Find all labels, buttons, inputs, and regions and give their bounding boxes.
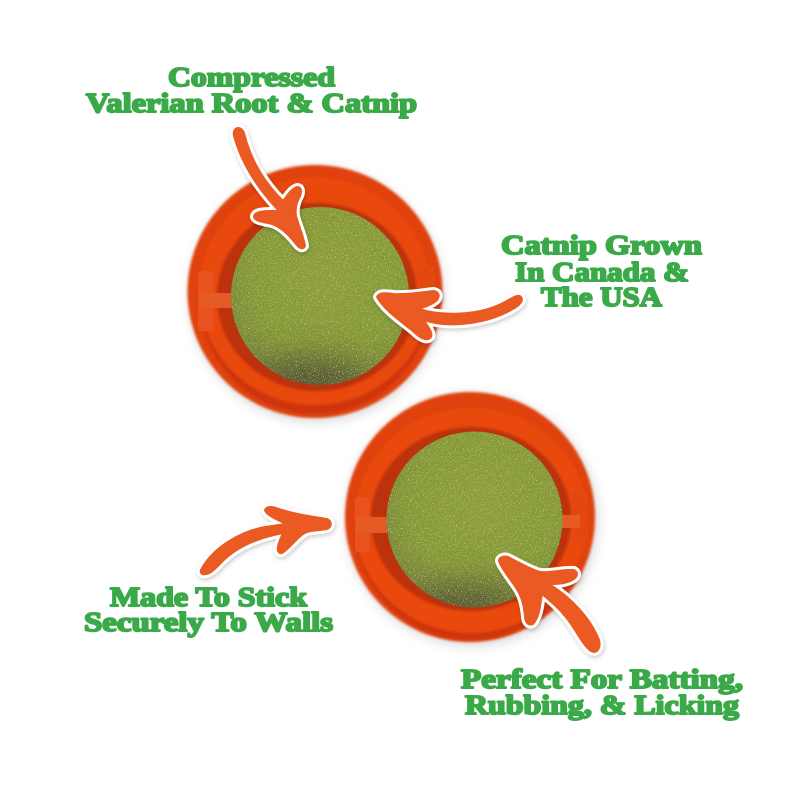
arrow: to catnip grown label [377,291,522,339]
lower rim shading [199,178,431,414]
label: made to stick securely to walls: Made To Stick [110,582,307,612]
cap opening [371,427,571,611]
label: catnip grown in Canada and the USA: Catnip Grown [501,230,702,260]
orange cap base [345,392,595,642]
label: compressed valerian root and catnip: Compressed [168,62,335,92]
right tab [417,266,435,306]
toy: bottom catnip ball in orange cap [345,392,598,646]
raised inner ring [354,407,588,633]
label: perfect for batting, rubbing, and licking [461,664,743,720]
cap opening [217,203,417,391]
label: perfect for batting, rubbing, and licking: Perfect For Batting, [461,664,743,694]
cap shadow [189,168,443,422]
label: compressed valerian root and catnip [86,62,417,118]
label: compressed valerian root and catnip: Valerian Root & Catnip [86,88,417,118]
left tab and stem [198,271,233,331]
label: made to stick securely to walls: Securely To Walls [84,607,333,637]
left tab and stem [355,497,390,552]
lower rim shading [354,408,586,640]
raised inner ring [199,177,431,405]
label: made to stick securely to walls [84,582,333,637]
toy: top catnip ball in orange cap [188,165,443,422]
label: catnip grown in Canada and the USA [501,230,702,312]
catnip ball [386,432,562,608]
label: perfect for batting, rubbing, and licking: Rubbing, & Licking [465,690,740,720]
label: catnip grown in Canada and the USA: In Canada & [515,257,689,287]
arrow: to wall-sticking base [201,507,331,574]
arrow: to batting surface [499,557,600,652]
arrow: to compressed ball [234,128,305,248]
right tab and stem [560,492,588,542]
catnip ball [231,207,409,385]
orange cap base [188,165,442,418]
cap shadow [346,394,598,646]
label: catnip grown in Canada and the USA: The USA [541,282,663,312]
